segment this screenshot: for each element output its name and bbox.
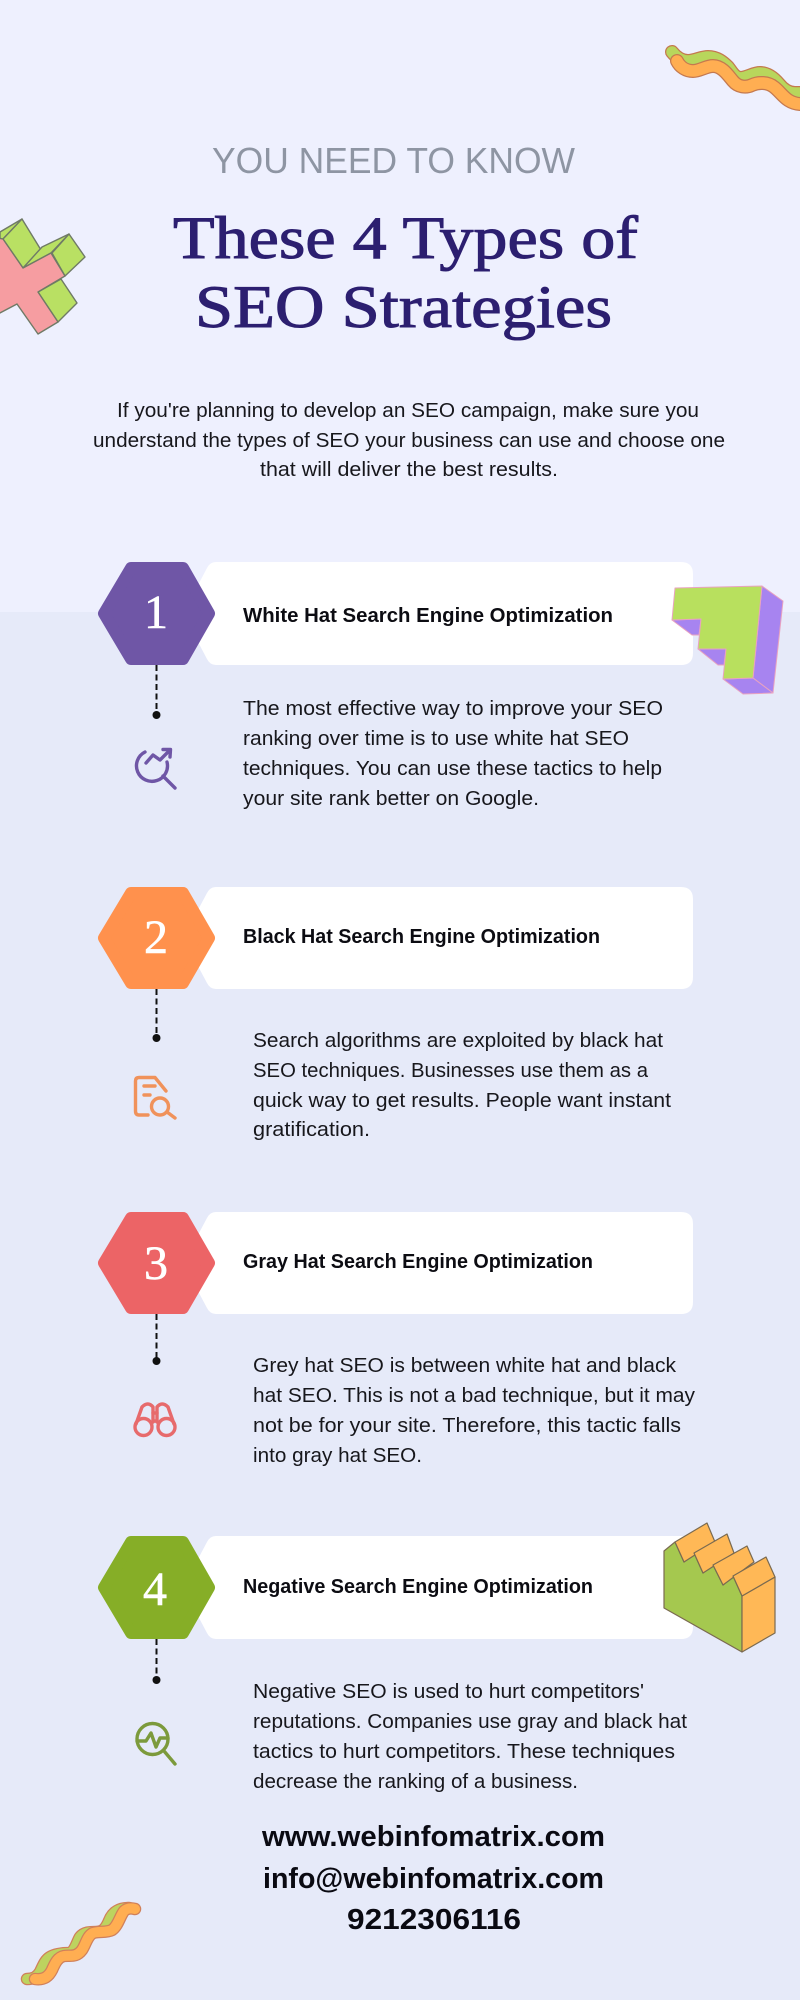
decoration: bottom squiggle [27,1908,135,1979]
hexagon badge 4: 4 [143,1563,167,1616]
connector 2 [152,989,160,1042]
heading bar 4 [183,1536,693,1639]
hexagon badge 3 [104,1218,209,1308]
body text 1 [243,697,663,810]
hexagon badge 4 [104,1542,209,1633]
intro paragraph: that will deliver the best results. [260,458,558,481]
decoration: top squiggle [672,52,800,104]
body text 2: Search algorithms are exploited by black hat [253,1029,663,1052]
connector 1 [152,665,160,719]
connector 4 [152,1639,160,1684]
heading text 1: White Hat Search Engine Optimization [243,604,613,627]
body text 3: hat SEO. This is not a bad technique, but it may [253,1384,696,1407]
intro paragraph: understand the types of SEO your business can use and choose one [93,429,725,452]
panel: step 2 black hat [104,887,693,1141]
panel: step 4 negative [104,1536,693,1793]
body text 3 [253,1354,696,1467]
hexagon badge 2: 2 [144,911,168,964]
hexagon badge 1 [104,568,209,659]
heading bar 1 [183,562,693,665]
intro paragraph [93,399,725,481]
hexagon badge 3: 3 [144,1237,168,1290]
eyebrow heading: YOU NEED TO KNOW [212,140,575,181]
contact details: info@webinfomatrix.com [263,1863,604,1895]
heading bar 3 [183,1212,693,1314]
connector 3 [152,1314,160,1365]
intro paragraph: If you're planning to develop an SEO campaign, make sure you [117,399,699,422]
body text 4: Negative SEO is used to hurt competitors' [253,1680,644,1703]
body text 1: The most effective way to improve your SEO [243,697,663,720]
body text 4 [253,1680,687,1793]
body text 1: ranking over time is to use white hat SEO [243,727,629,750]
body text 1: your site rank better on Google. [243,787,539,810]
body text 2: SEO techniques. Businesses use them as a [253,1059,649,1082]
decoration: pink and green cross [0,219,85,334]
icon: magnifier with pulse [137,1724,175,1764]
body text 3: not be for your site. Therefore, this tactic falls [253,1414,681,1437]
decoration: purple and green stair block [672,586,783,694]
icon: binoculars [135,1404,175,1436]
heading text 3: Gray Hat Search Engine Optimization [243,1250,593,1273]
panel: step 3 gray hat [104,1212,696,1467]
icon: document search [136,1078,175,1118]
heading text 2: Black Hat Search Engine Optimization [243,925,600,948]
body text 1: techniques. You can use these tactics to help [243,757,662,780]
body text 3: Grey hat SEO is between white hat and black [253,1354,677,1377]
body text 4: decrease the ranking of a business. [253,1770,578,1793]
hexagon badge 2 [104,893,209,983]
body text 2 [253,1029,671,1141]
title: These 4 Types of [173,205,638,271]
body text 2: quick way to get results. People want instant [253,1089,671,1112]
hexagon badge 1: 1 [144,586,168,639]
contact details [261,1821,605,1936]
heading text 4: Negative Search Engine Optimization [243,1575,593,1598]
icon: magnifier with growth arrow [136,750,175,788]
body text 4: reputations. Companies use gray and black hat [253,1710,687,1733]
body text 2: gratification. [253,1118,370,1141]
title: SEO Strategies [195,274,612,340]
contact details: www.webinfomatrix.com [261,1821,605,1853]
contact details: 9212306116 [347,1904,521,1936]
body text 4: tactics to hurt competitors. These techniques [253,1740,675,1763]
decoration: factory-shaped block [664,1523,775,1652]
panel: step 1 white hat [104,562,693,810]
body text 3: into gray hat SEO. [253,1444,422,1467]
title [173,205,638,340]
heading bar 2 [183,887,693,989]
